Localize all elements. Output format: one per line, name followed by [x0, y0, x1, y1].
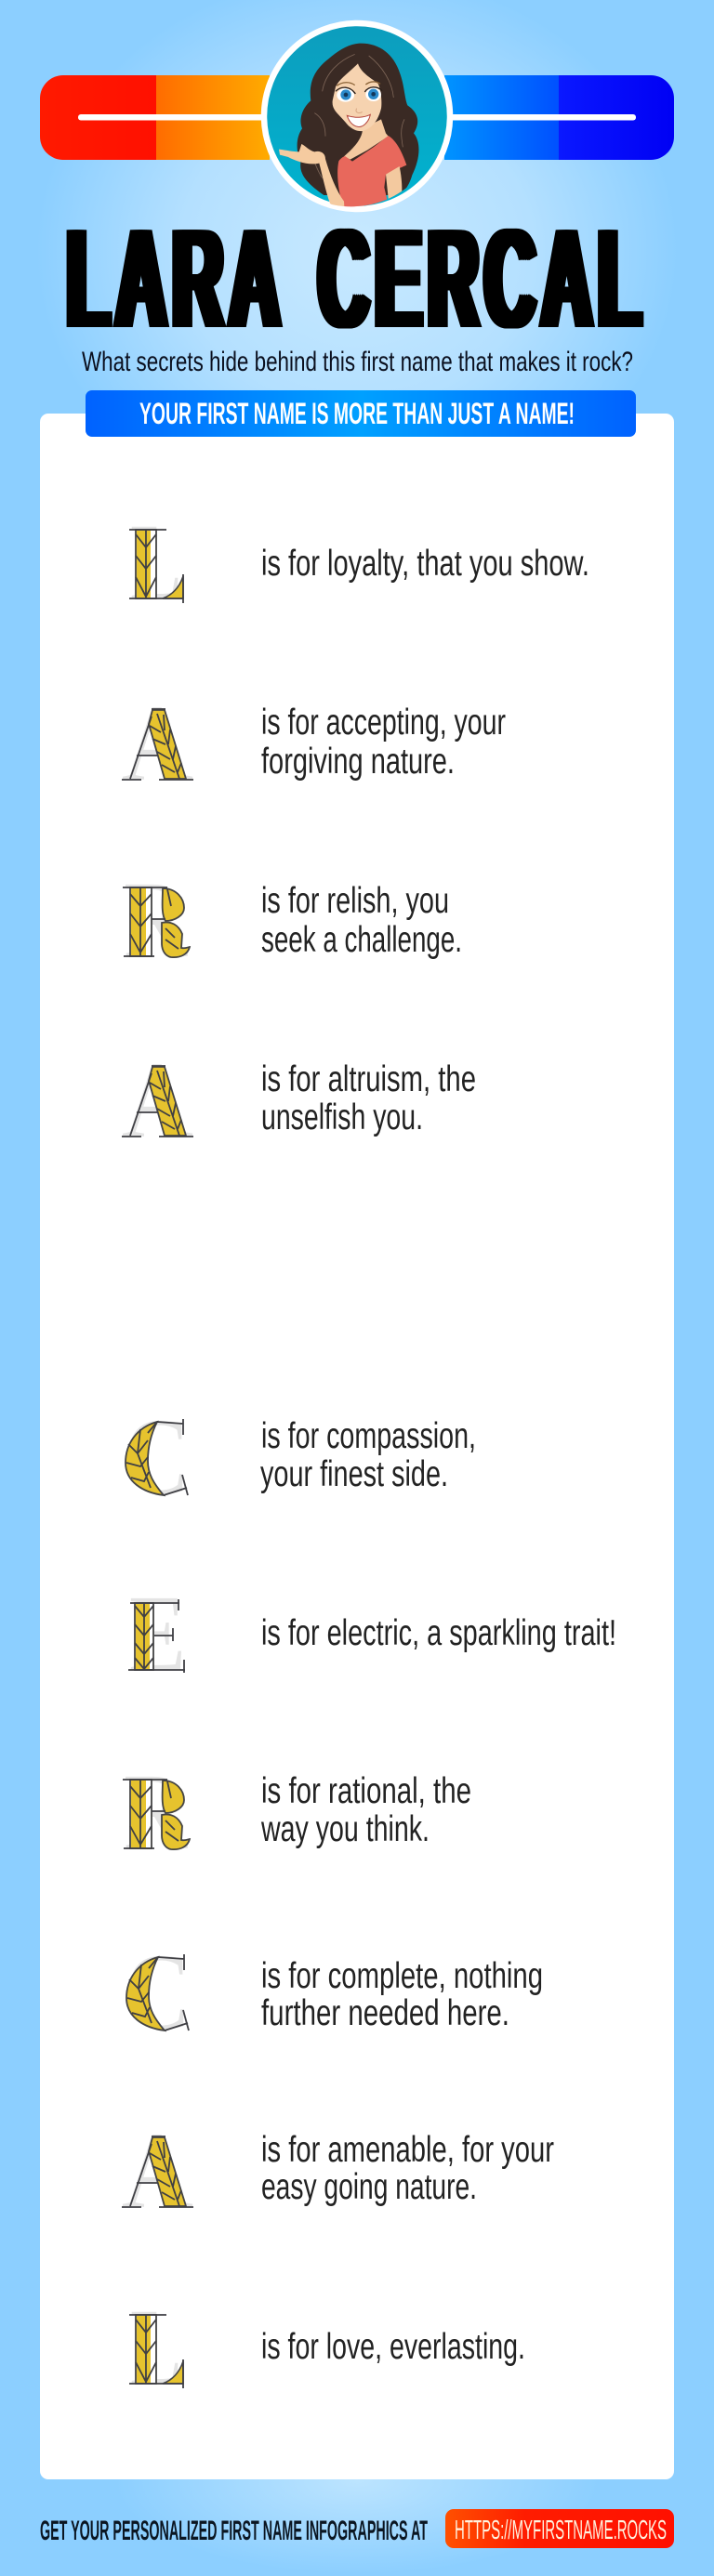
- text: compassion: [260, 1416, 476, 1494]
- text: amenable: is for amenable, for your: [261, 2130, 554, 2170]
- icon: wheat letter A: A: [122, 682, 193, 804]
- text: love: is for love, everlasting.: [261, 2327, 525, 2367]
- text: accepting: is for accepting, your: [261, 703, 506, 743]
- avatar: cartoon woman in a circle: [264, 23, 450, 212]
- row: C for complete: [126, 1931, 543, 2053]
- row: C for compassion: [125, 1396, 476, 1518]
- header colour bar: [40, 75, 674, 160]
- text: rational: [260, 1771, 471, 1849]
- title: LARA CERCAL: [67, 200, 647, 358]
- text: compassion: is for compassion,: [261, 1416, 476, 1456]
- text: altruism: is for altruism, the: [261, 1059, 476, 1099]
- row: L for love: [129, 2286, 525, 2408]
- footer link button: [445, 2509, 674, 2548]
- icon: wheat letter R: R: [123, 1751, 188, 1873]
- text: relish: seek a challenge.: [261, 920, 462, 960]
- row: L for loyalty: [129, 501, 589, 623]
- text: compassion: your finest side.: [260, 1454, 448, 1494]
- text: amenable: easy going nature.: [261, 2167, 477, 2207]
- icon: wheat letter C: C: [126, 1931, 189, 2053]
- text: altruism: [261, 1059, 476, 1137]
- row: A for amenable: [122, 2109, 554, 2231]
- text: amenable: [261, 2130, 554, 2207]
- text: loyalty: is for loyalty, that you show.: [261, 544, 589, 584]
- text: relish: [261, 881, 462, 960]
- banner: [86, 390, 636, 437]
- row: A for altruism: [122, 1039, 476, 1161]
- text: complete: is for complete, nothing: [261, 1956, 543, 1996]
- row: R for rational: [123, 1751, 471, 1873]
- text: rational: way you think.: [260, 1809, 430, 1849]
- icon: wheat letter L: L: [129, 2286, 183, 2408]
- row: R for relish: [123, 859, 462, 980]
- icon: wheat letter E: E: [128, 1572, 186, 1694]
- icon: wheat letter C: C: [125, 1396, 188, 1518]
- text: accepting: forgiving nature.: [261, 742, 455, 782]
- icon: wheat letter L: L: [129, 501, 183, 623]
- icon: wheat letter R: R: [123, 859, 188, 980]
- text: relish: is for relish, you: [261, 881, 449, 921]
- row: E for electric: [128, 1572, 616, 1694]
- text: altruism: unselfish you.: [261, 1097, 423, 1137]
- text: accepting: [261, 703, 506, 782]
- text: complete: [261, 1956, 543, 2033]
- icon: wheat letter A: A: [122, 1039, 193, 1161]
- icon: wheat letter A: A: [122, 2109, 193, 2231]
- panel: white content card: [40, 414, 674, 2479]
- text: complete: further needed here.: [261, 1993, 509, 2033]
- row: A for accepting: [122, 682, 506, 804]
- text: rational: is for rational, the: [261, 1771, 471, 1811]
